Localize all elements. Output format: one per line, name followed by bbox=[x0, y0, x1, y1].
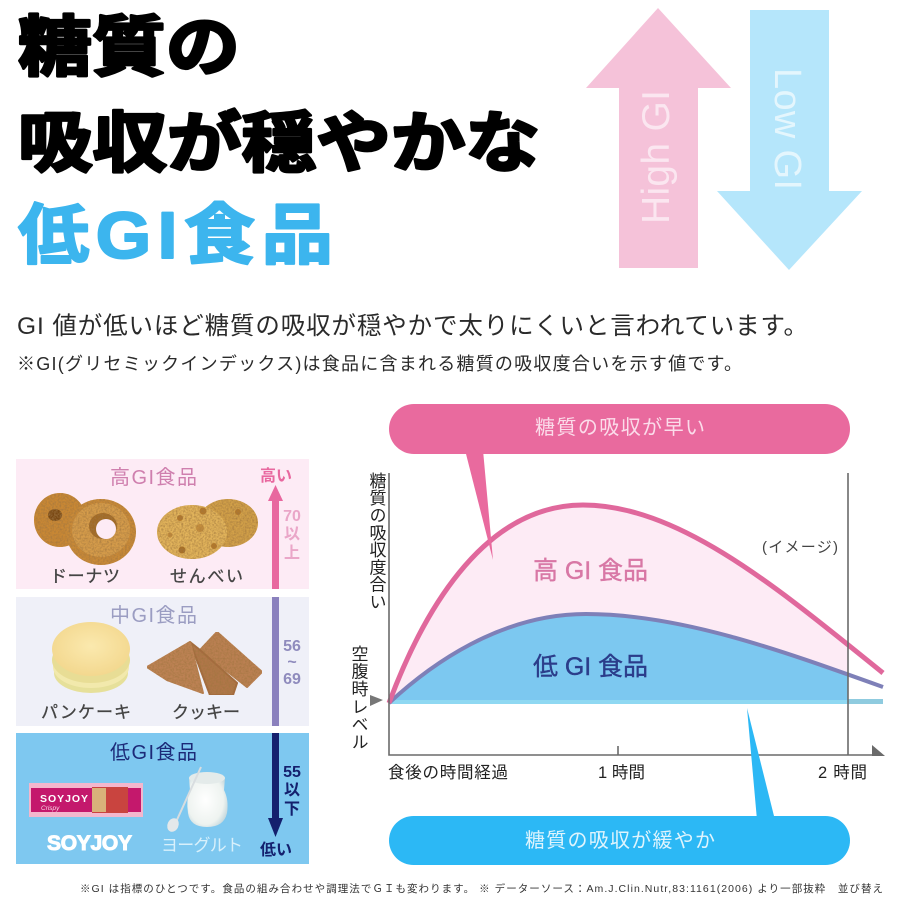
label: 70 or more bbox=[283, 508, 301, 562]
panel: high GI foods bbox=[16, 459, 309, 589]
label: senbei: せんべい bbox=[170, 567, 243, 586]
label: 56 to 69: 69 bbox=[283, 671, 301, 688]
arrow: High GI: High GI bbox=[635, 90, 678, 224]
label: 56 to 69 bbox=[283, 638, 301, 688]
arrow: Low GI bbox=[717, 10, 862, 270]
area: low GI bbox=[396, 616, 848, 700]
icon: pancakes bbox=[52, 622, 130, 693]
footnote: ※GI は指標のひとつです。食品の組み合わせや調理法でＧＩも変わります。 ※ データーソース：Am.J.Clin.Nutr,83:1161(2006) より一部抜粋 並び替え bbox=[80, 882, 883, 895]
label: 55 or less bbox=[283, 764, 301, 818]
callout: fast absorption: 糖質の吸収が早い bbox=[535, 416, 705, 439]
label: 55 or less: 下 bbox=[284, 801, 300, 818]
label: yogurt: ヨーグルト bbox=[161, 836, 243, 855]
callout: slow absorption bbox=[389, 708, 850, 865]
label: 70 or more: 以 bbox=[284, 526, 300, 543]
x axis label: elapsed: 食後の時間経過 bbox=[388, 763, 508, 782]
heading: mid GI: 中GI食品 bbox=[110, 604, 197, 627]
icon: SOYJOY bar: Crispy bbox=[41, 805, 60, 812]
chart: absorption curves bbox=[348, 472, 885, 782]
arrow: High GI bbox=[586, 8, 731, 268]
label: 56 to 69: ~ bbox=[287, 654, 297, 671]
heading: low GI: 低GI食品 bbox=[110, 741, 197, 764]
x axis label: 2 hours: 2 時間 bbox=[818, 763, 867, 782]
axes bbox=[370, 473, 885, 756]
label: donut: ドーナツ bbox=[50, 567, 120, 586]
label: 56 to 69: 56 bbox=[283, 638, 301, 655]
icon: donuts bbox=[34, 493, 136, 565]
note text: ※GI(グリセミックインデックス)は食品に含まれる糖質の吸収度合いを示す値です。 bbox=[17, 354, 742, 374]
curve label: high GI: 高 GI 食品 bbox=[533, 557, 648, 585]
label: 70 or more: 70 bbox=[283, 508, 301, 525]
label: pancake: パンケーキ bbox=[41, 703, 131, 722]
x axis label: 1 hour: 1 時間 bbox=[598, 763, 645, 782]
label: 55 or less: 以 bbox=[284, 782, 300, 799]
label: high: 高い bbox=[260, 466, 292, 485]
curve: high GI bbox=[389, 505, 883, 703]
title: 糖質の bbox=[18, 11, 240, 84]
panel: low GI foods bbox=[16, 733, 309, 864]
scale arrow: GI level bbox=[260, 466, 301, 859]
logo: SOYJOY: SOYJOY bbox=[47, 832, 132, 855]
arrow: Low GI: Low GI bbox=[766, 68, 808, 190]
title: 低GI食品 bbox=[18, 198, 333, 272]
title: 吸収が穏やかな bbox=[18, 106, 540, 180]
icon: SOYJOY bar: SOYJOY bbox=[40, 793, 88, 805]
title bbox=[18, 11, 540, 272]
label: cookie: クッキー bbox=[172, 703, 240, 722]
y axis label: 糖質の吸収度合い bbox=[366, 472, 386, 610]
icon: senbei bbox=[157, 499, 258, 559]
icon: SOYJOY bar bbox=[29, 783, 143, 817]
callout: slow absorption: 糖質の吸収が緩やか bbox=[525, 829, 715, 852]
lead text: GI 値が低いほど糖質の吸収が穏やかで太りにくいと言われています。 bbox=[17, 312, 808, 340]
curve: low GI bbox=[389, 614, 883, 703]
area: high GI bbox=[395, 508, 847, 694]
curve label: low GI: 低 GI 食品 bbox=[533, 653, 648, 681]
label: low: 低い bbox=[260, 841, 292, 859]
heading: high GI: 高GI食品 bbox=[110, 466, 197, 489]
icon: cookies bbox=[147, 632, 262, 695]
image note: (イメージ) bbox=[762, 539, 838, 556]
label: 55 or less: 55 bbox=[283, 764, 301, 781]
baseline label: 空腹時レベル bbox=[348, 645, 368, 750]
panel: mid GI foods bbox=[16, 597, 309, 726]
icon: yogurt bbox=[165, 767, 228, 834]
callout: fast absorption bbox=[389, 404, 850, 560]
label: 70 or more: 上 bbox=[284, 544, 300, 562]
